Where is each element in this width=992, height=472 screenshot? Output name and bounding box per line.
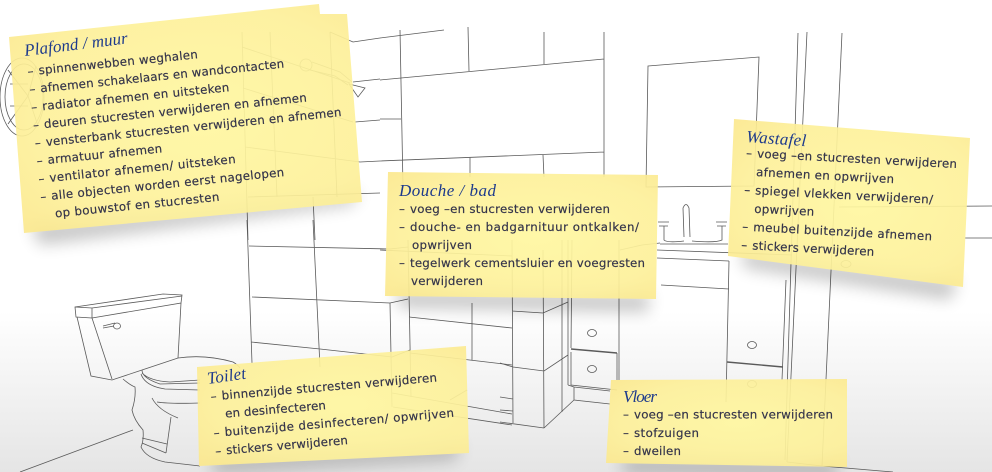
bathroom line drawing: walls and tiles	[242, 27, 992, 472]
list: Wastafel tasks: voeg –en stucresten verwijderen	[757, 147, 957, 171]
panel: Toilet	[197, 346, 469, 466]
list: Wastafel tasks: –	[746, 146, 753, 160]
list: Toilet tasks: –	[213, 426, 220, 440]
panel: Vloer	[606, 379, 847, 467]
list: Plafond / muur tasks: op bouwstof en stucresten	[54, 190, 220, 220]
list: Plafond / muur tasks: afnemen schakelaars en wandcontacten	[40, 57, 285, 95]
list: Plafond / muur tasks: –	[40, 189, 47, 204]
list: Wastafel tasks: meubel buitenzijde afnemen	[753, 220, 932, 243]
list: Douche / bad tasks: verwijderen	[411, 274, 483, 288]
list: Vloer tasks: –	[623, 426, 629, 440]
list: Vloer tasks: dweilen	[634, 444, 681, 458]
list: Vloer tasks: –	[623, 444, 629, 458]
list: Toilet tasks: –	[215, 444, 222, 458]
list: Vloer tasks: voeg –en stucresten verwijderen	[634, 408, 833, 422]
list: Douche / bad tasks: opwrijven	[412, 238, 472, 252]
panel: Wastafel	[728, 119, 970, 287]
list: Toilet tasks	[210, 369, 456, 458]
icon: shower head	[300, 59, 365, 97]
list: Douche / bad tasks: –	[399, 256, 405, 270]
list: Plafond / muur tasks: –	[27, 64, 34, 78]
list: Wastafel tasks: spiegel vlekken verwijderen/	[755, 183, 933, 207]
list: Plafond / muur tasks	[27, 33, 349, 222]
heading: Toilet: Toilet	[206, 364, 248, 388]
heading: Vloer: Vloer	[623, 387, 657, 406]
list: Plafond / muur tasks: –	[36, 153, 43, 168]
list: Plafond / muur tasks: radiator afnemen en uitsteken	[41, 80, 230, 113]
note shadows	[30, 192, 958, 472]
list: Douche / bad tasks: douche- en badgarnituur ontkalken/	[410, 220, 639, 234]
list: Plafond / muur tasks: –	[31, 100, 38, 114]
list: Wastafel tasks: afnemen en opwrijven	[756, 165, 894, 186]
list: Toilet tasks: en desinfecteren	[225, 398, 326, 421]
list: Douche / bad tasks: –	[399, 220, 405, 234]
list: Toilet tasks: binnenzijde stucresten verwijderen	[221, 371, 437, 403]
list: Plafond / muur tasks: alle objecten worden eerst nagelopen	[51, 165, 285, 203]
panel: Plafond / muur	[9, 4, 362, 233]
list: Douche / bad tasks: –	[399, 202, 405, 216]
panel: Douche / bad	[385, 172, 658, 299]
list: Wastafel tasks: –	[742, 220, 749, 234]
list: Vloer tasks: stofzuigen	[634, 426, 699, 440]
heading: Wastafel: Wastafel	[746, 127, 807, 150]
icon: cabinet drawers and door	[571, 260, 851, 390]
list: Plafond / muur tasks: spinnenwebben weghalen	[38, 47, 198, 77]
list: Toilet tasks: –	[210, 389, 217, 403]
list: Plafond / muur tasks: –	[38, 171, 45, 186]
list: Plafond / muur tasks: –	[34, 136, 42, 150]
list: Wastafel tasks: stickers verwijderen	[752, 238, 875, 259]
icon: sink faucet	[658, 204, 728, 244]
list: Toilet tasks: buitenzijde desinfecteren/ opwrijven	[224, 406, 454, 439]
heading: Plafond / muur: Plafond / muur	[22, 28, 129, 60]
heading: Douche / bad: Douche / bad	[398, 181, 496, 200]
icon: ceiling fan / lamp	[0, 58, 44, 136]
list: Plafond / muur tasks: ventilator afnemen/ uitsteken	[49, 152, 236, 185]
list: Douche / bad tasks: voeg –en stucresten verwijderen	[410, 202, 610, 216]
list: Plafond / muur tasks: armatuur afnemen	[47, 141, 163, 167]
list: Douche / bad tasks	[399, 202, 645, 288]
list: Vloer tasks	[623, 408, 833, 458]
list: Plafond / muur tasks: –	[29, 82, 36, 96]
list: Wastafel tasks: –	[741, 238, 748, 252]
list: Plafond / muur tasks: –	[32, 118, 40, 132]
list: Plafond / muur tasks: deuren stucresten verwijderen en afnemen	[43, 90, 307, 131]
list: Toilet tasks: stickers verwijderen	[226, 433, 348, 457]
list: Wastafel tasks	[741, 146, 957, 263]
list: Vloer tasks: –	[623, 408, 629, 422]
list: Wastafel tasks: opwrijven	[754, 202, 815, 219]
list: Douche / bad tasks: tegelwerk cementsluier en voegresten	[410, 256, 645, 270]
list: Plafond / muur tasks: vensterbank stucresten verwijderen en afnemen	[45, 105, 342, 149]
icon: toilet	[20, 294, 240, 472]
list: Wastafel tasks: –	[744, 183, 751, 197]
